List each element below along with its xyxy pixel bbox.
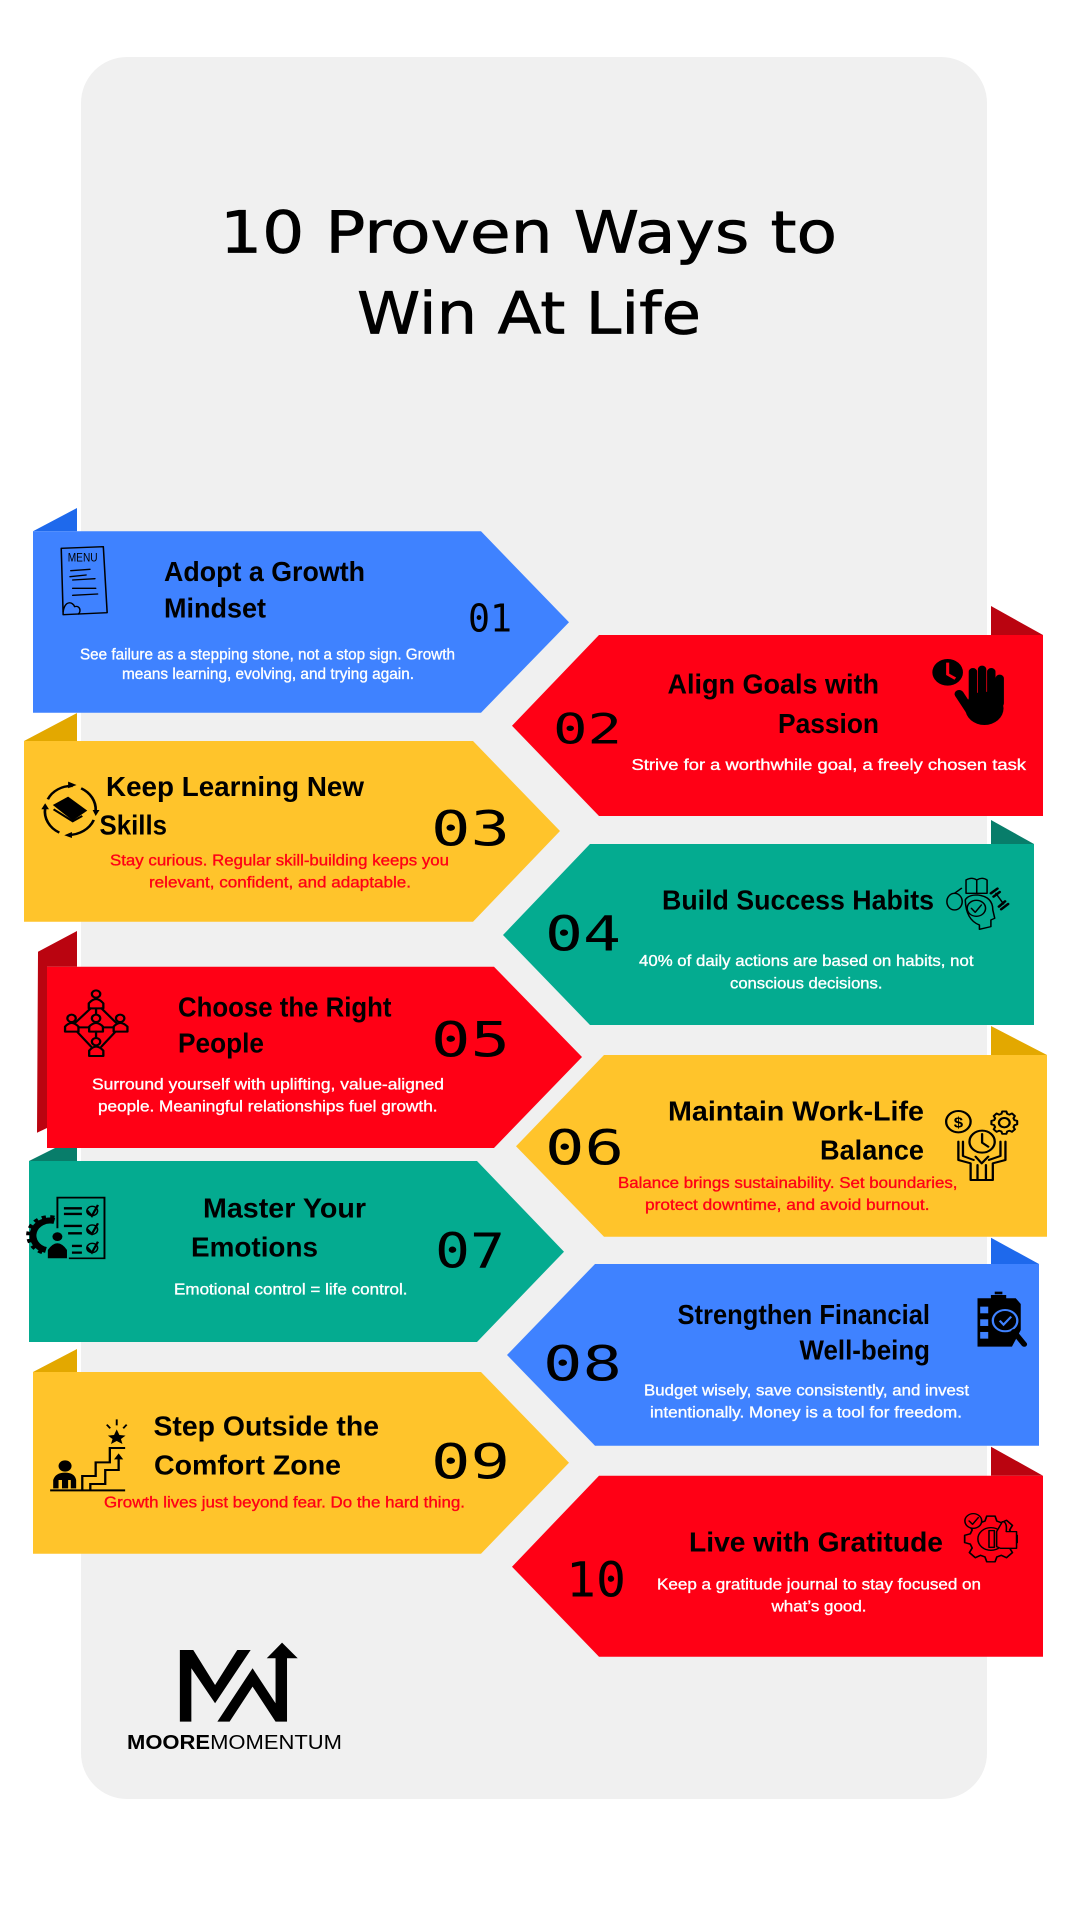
icon: checklist with person and gear: [28, 1198, 104, 1258]
heading 02: Passion: [778, 708, 879, 739]
description 09: Growth lives just beyond fear. Do the hard thing.: [104, 1494, 465, 1511]
heading 07: Emotions: [191, 1232, 318, 1263]
description 01: [80, 646, 455, 683]
icon: head with book, apple and dumbbell: [947, 878, 1008, 929]
description 05: people. Meaningful relationships fuel growth.: [98, 1098, 437, 1115]
description 05: [92, 1076, 444, 1115]
icon: people network: [65, 990, 127, 1056]
number 10: 10: [566, 1553, 626, 1609]
description 03: Stay curious. Regular skill-building keeps you: [110, 852, 449, 869]
heading 03: Keep Learning New: [106, 771, 364, 802]
banner 08: Strengthen Financial Well-being: [33, 1238, 1043, 1754]
description 02: Strive for a worthwhile goal, a freely chosen task: [632, 757, 1027, 774]
heading 02: Align Goals with: [668, 668, 879, 699]
description 03: [110, 852, 449, 891]
logo: Moore Momentum: [127, 1643, 342, 1754]
icon: menu card: [61, 547, 107, 615]
number 09: 09: [431, 1434, 510, 1490]
description 08: [644, 1382, 970, 1421]
logo mark: [180, 1643, 298, 1722]
description 04: 40% of daily actions are based on habits, not: [639, 953, 974, 970]
heading 03: [100, 771, 364, 840]
icon: money, time and gear balance: [946, 1111, 1017, 1180]
banner 09: Step Outside the Comfort Zone: [33, 1349, 1043, 1754]
heading 08: [678, 1299, 930, 1365]
number 01: 01: [468, 597, 512, 641]
description 10: [657, 1576, 981, 1615]
heading 06: Balance: [820, 1135, 924, 1166]
title: Win At Life: [357, 280, 701, 348]
description 01: means learning, evolving, and trying again.: [122, 666, 414, 683]
number 04: 04: [545, 907, 621, 963]
icon: gear with thumbs up and check: [965, 1514, 1017, 1562]
description 10: Keep a gratitude journal to stay focused on: [657, 1576, 981, 1593]
number 06: 06: [545, 1120, 624, 1176]
heading 04: Build Success Habits: [662, 884, 934, 915]
heading 01: [164, 556, 365, 624]
description 06: [618, 1175, 958, 1214]
heading 08: Strengthen Financial: [678, 1299, 930, 1330]
icon: money, time and gear balance: $: [954, 1115, 963, 1131]
number 05: 05: [431, 1013, 510, 1069]
description 01: See failure as a stepping stone, not a stop sign. Growth: [80, 646, 455, 663]
description 03: relevant, confident, and adaptable.: [149, 874, 411, 891]
number 02: 02: [553, 705, 622, 754]
heading 05: Choose the Right: [178, 992, 392, 1023]
title: 10 Proven Ways to: [220, 199, 837, 267]
heading 06: [668, 1096, 924, 1166]
description 05: Surround yourself with uplifting, value-aligned: [92, 1076, 444, 1093]
number 03: 03: [431, 801, 510, 857]
banner 02: Align Goals with Passion: [24, 606, 1047, 1754]
banner 03: Keep Learning New Skills: [24, 713, 1047, 1754]
description 06: Balance brings sustainability. Set boundaries,: [618, 1175, 958, 1192]
banner 05: Choose the Right People: [28, 931, 1047, 1754]
icon: clipboard with magnifier: [978, 1292, 1024, 1347]
logo wordmark: MOORE MOMENTUM: [127, 1731, 342, 1754]
icon: menu card: MENU: [68, 551, 98, 564]
description 08: Budget wisely, save consistently, and invest: [644, 1382, 970, 1399]
number 08: 08: [543, 1337, 622, 1393]
banner 04: Build Success Habits: [28, 820, 1047, 1754]
heading 05: People: [178, 1027, 264, 1058]
banner 06: Maintain Work-Life Balance: [28, 1026, 1047, 1754]
banner 10: Live with Gratitude: [127, 1447, 1043, 1754]
banner 07: Master Your Emotions: [28, 1148, 1043, 1754]
description 07: Emotional control = life control.: [174, 1281, 408, 1298]
heading 09: Step Outside the: [154, 1410, 379, 1441]
heading 10: Live with Gratitude: [689, 1526, 943, 1557]
heading 08: Well-being: [800, 1334, 930, 1365]
description 04: [639, 953, 974, 992]
icon: person climbing stairs to star: [50, 1419, 127, 1490]
heading 01: Adopt a Growth: [164, 556, 365, 587]
heading 01: Mindset: [164, 593, 266, 624]
description 04: conscious decisions.: [730, 975, 882, 992]
heading 02: [668, 668, 879, 739]
description 10: what’s good.: [770, 1598, 866, 1615]
description 08: intentionally. Money is a tool for freedom.: [650, 1404, 962, 1421]
heading 07: Master Your: [203, 1192, 366, 1223]
banner 01: Adopt a Growth Mindset: [24, 508, 1047, 1754]
description 06: protect downtime, and avoid burnout.: [645, 1197, 930, 1214]
heading 09: [154, 1410, 379, 1480]
title: [220, 199, 837, 348]
number 07: 07: [435, 1224, 505, 1280]
heading 05: [178, 992, 392, 1058]
icon: clock and raised hand: [932, 659, 1004, 725]
background panel: [81, 57, 987, 1799]
icon: books with cycle arrows: [41, 782, 100, 838]
heading 07: [191, 1192, 366, 1263]
heading 06: Maintain Work-Life: [668, 1096, 924, 1127]
heading 03: Skills: [100, 809, 167, 840]
heading 09: Comfort Zone: [154, 1449, 341, 1480]
